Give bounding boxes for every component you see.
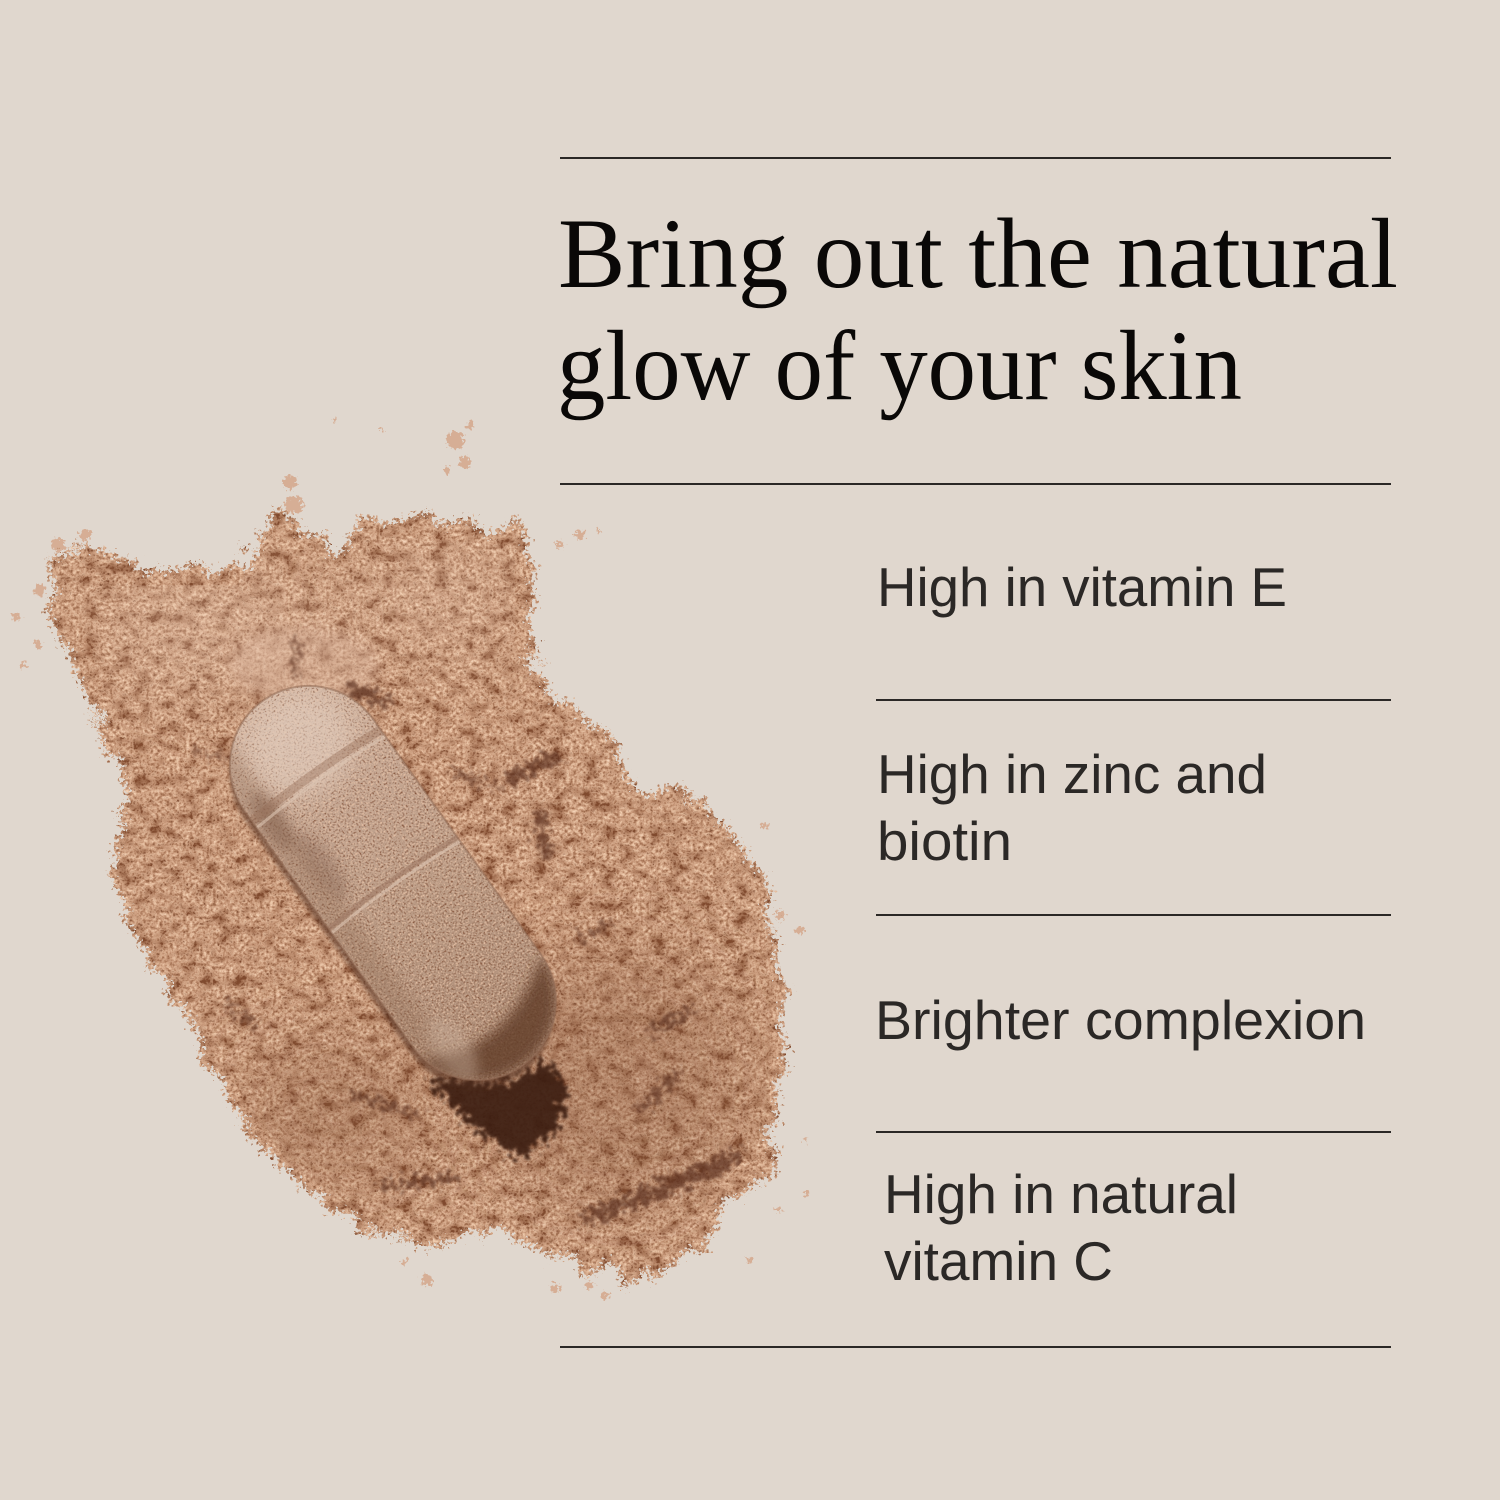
capsule smudges: [248, 790, 298, 852]
capsule: [228, 684, 558, 1088]
title: [557, 198, 1398, 421]
capsule seam upper: [250, 727, 385, 828]
powder pile with capsule: [12, 418, 809, 1299]
powder cracks: [198, 640, 735, 1218]
benefit: zinc and biotin: High in zinc and: [877, 743, 1267, 805]
capsule contact shadow: [200, 667, 584, 1119]
benefit: natural vitamin C: [884, 1163, 1238, 1292]
benefit: vitamin E: High in vitamin E: [877, 556, 1287, 618]
capsule top highlight: [240, 687, 362, 809]
shadow beneath capsule: [425, 1062, 568, 1158]
benefit: zinc and biotin: biotin: [877, 810, 1012, 872]
benefit: natural vitamin C: High in natural: [884, 1163, 1238, 1225]
title: glow of your skin: [557, 310, 1242, 421]
powder shading: [100, 550, 750, 1218]
powder bump above capsule: [230, 627, 380, 703]
benefit: natural vitamin C: vitamin C: [884, 1230, 1113, 1292]
powder scatter: [12, 418, 809, 1299]
title: Bring out the natural: [558, 198, 1398, 309]
benefit: brighter complexion: Brighter complexion: [875, 989, 1366, 1051]
capsule dark end: [422, 952, 556, 1080]
powder body: [50, 512, 785, 1280]
capsule lower shading: [230, 745, 451, 1073]
capsule outline: [199, 655, 587, 1111]
benefit: zinc and biotin: [877, 743, 1267, 872]
capsule seam lower: [327, 835, 460, 933]
